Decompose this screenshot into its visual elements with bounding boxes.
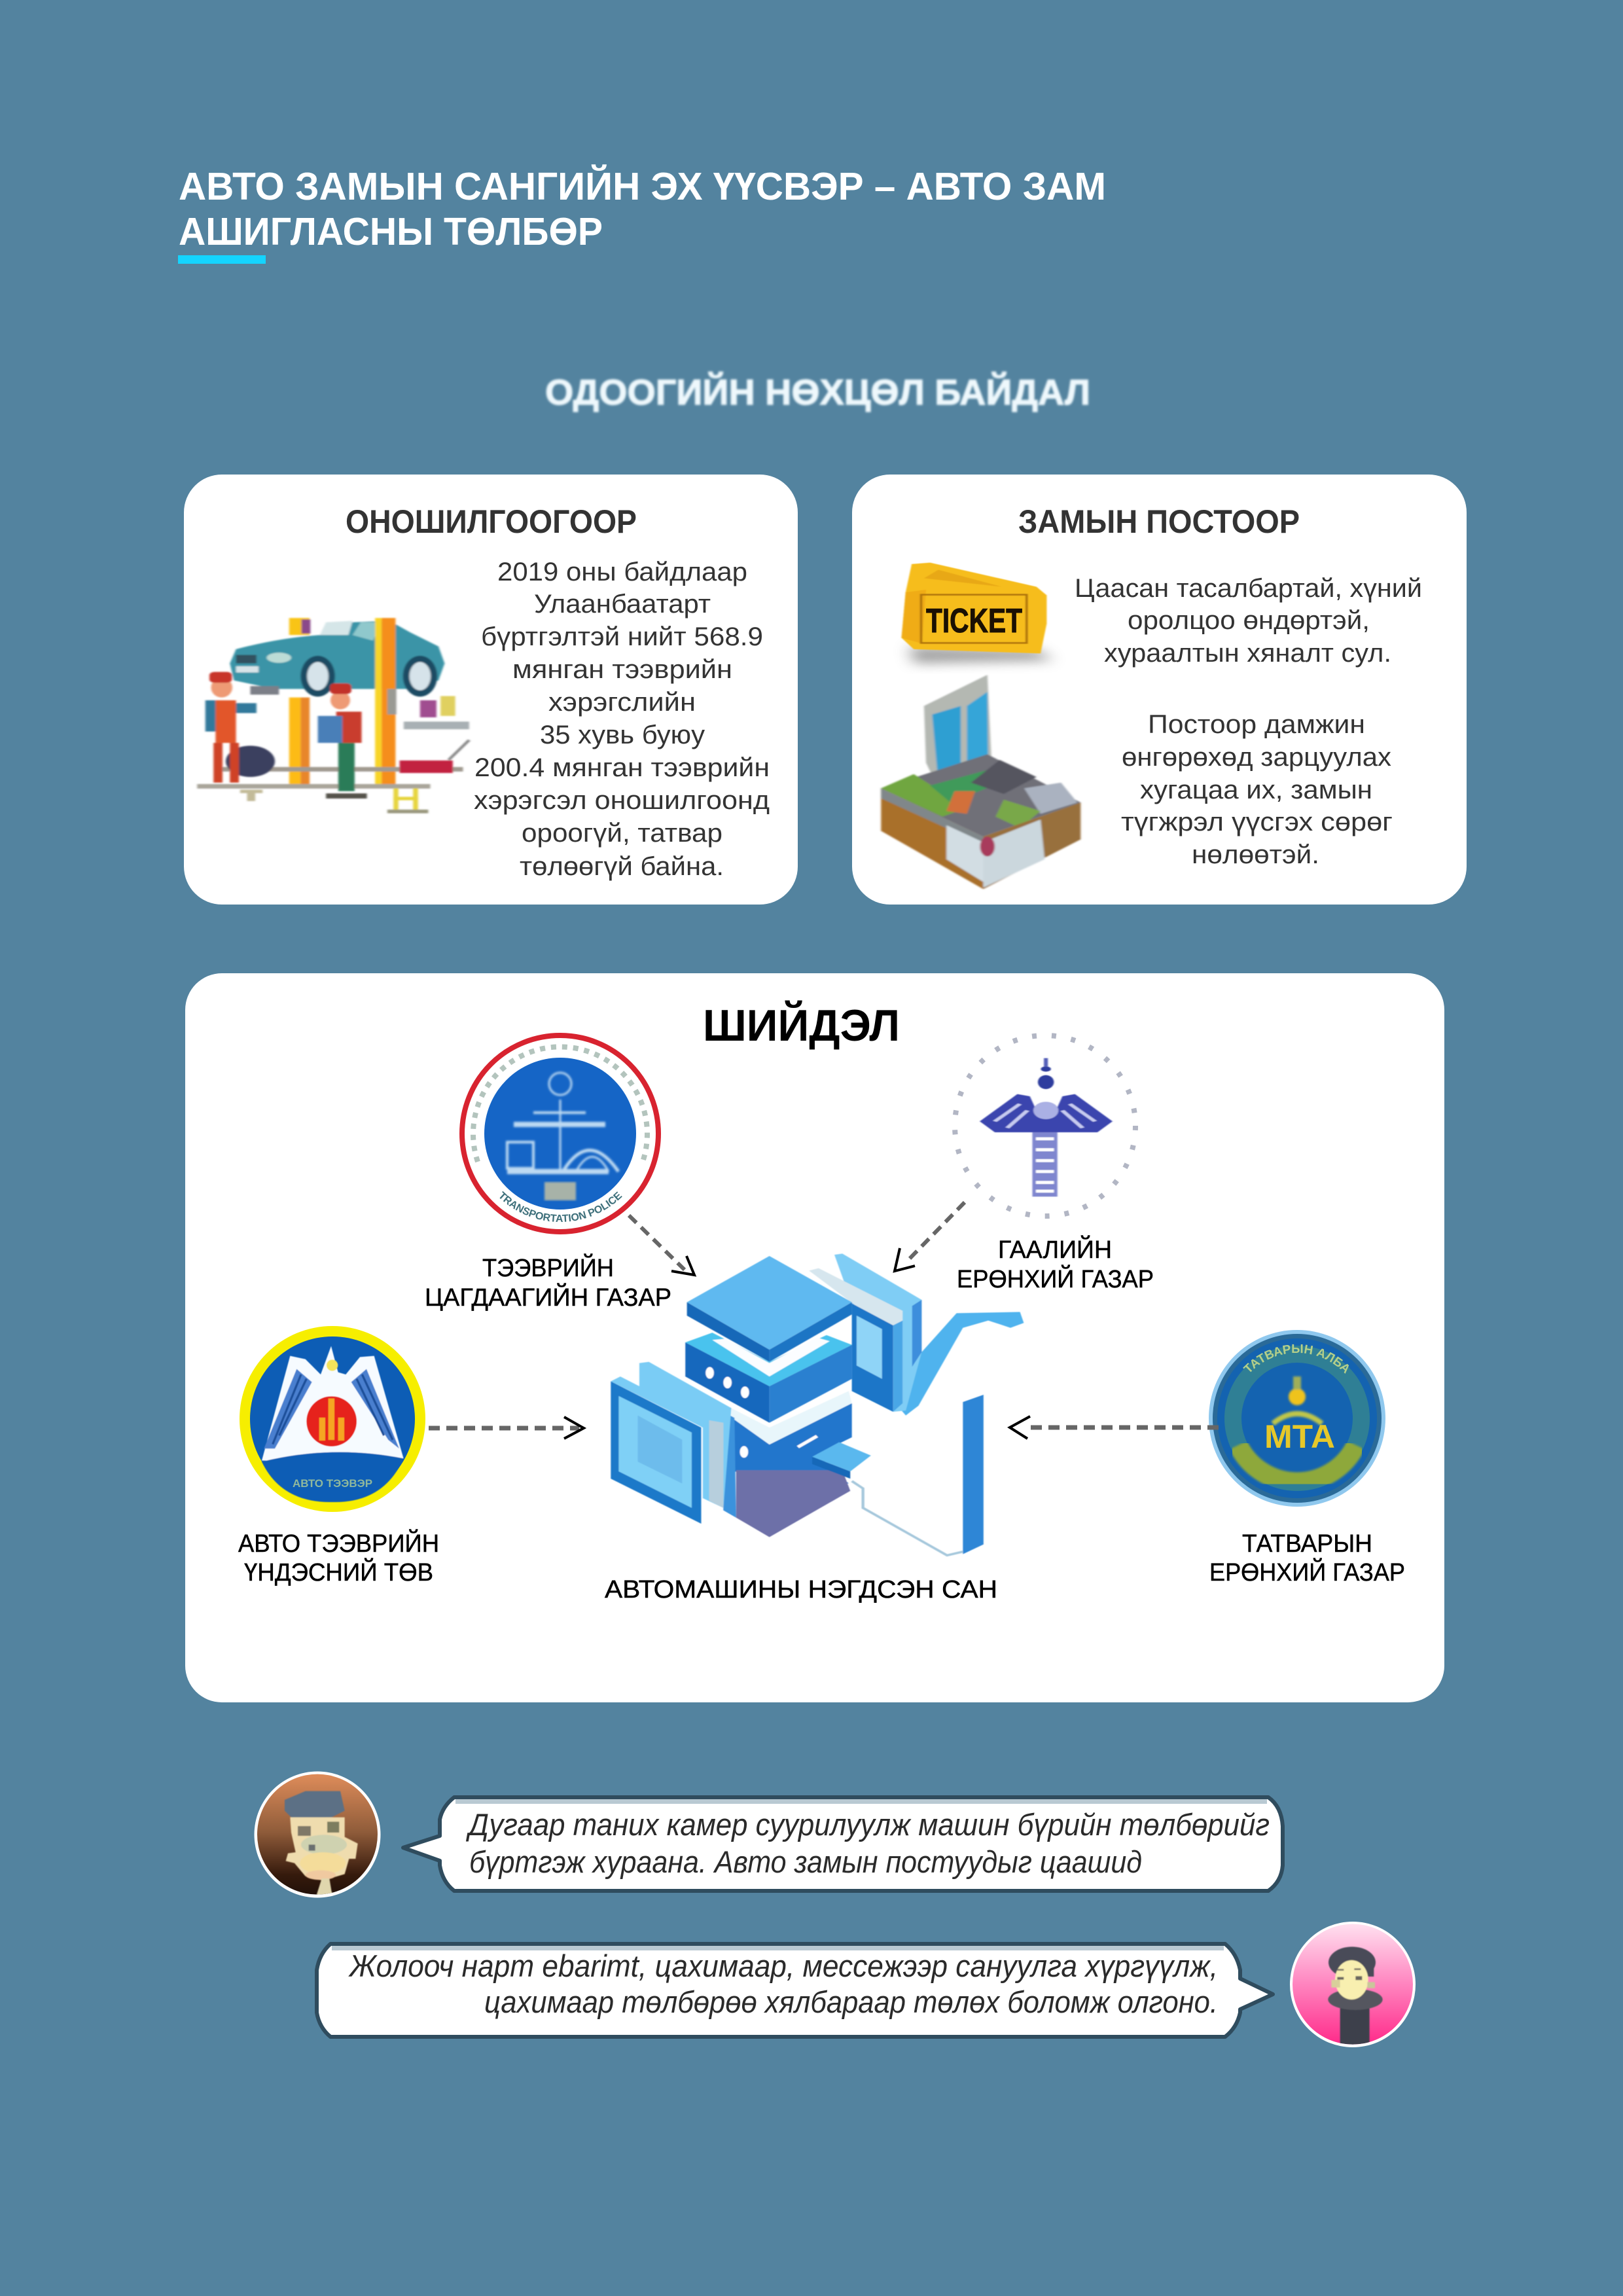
icon: ticket: TICKET	[926, 602, 1022, 640]
body text: diagnostics	[474, 558, 770, 881]
illustration: server database	[611, 1253, 1024, 1555]
illustration: building on a city block	[881, 675, 1080, 889]
label: customs	[957, 1234, 1154, 1293]
title: АШИГЛАСНЫ ТӨЛБӨР	[179, 210, 603, 253]
title accent bar	[178, 255, 266, 264]
body text: diagnostics: мянган тээврийн	[512, 655, 732, 684]
label: national road transport center: АВТО ТЭЭВРИЙН	[238, 1528, 439, 1558]
body text: diagnostics: төлөөгүй байна.	[520, 852, 724, 881]
body text: diagnostics: 200.4 мянган тээврийн	[474, 753, 770, 782]
title	[179, 164, 1106, 253]
bubble text: camera recognition: бүртгэж хураана. Авто замын постуудыг цаашид	[469, 1844, 1142, 1879]
arrow: road transport center to database	[429, 1417, 584, 1439]
speech bubble: electronic reminders	[317, 1944, 1273, 2037]
body text: road posts, congestion: өнгөрөхөд зарцуулах	[1122, 743, 1391, 772]
logo: national road transport center: АВТО ТЭЭВЭР	[293, 1477, 372, 1490]
body text: road posts, paper tickets: Цаасан тасалбартай, хүний	[1075, 574, 1422, 603]
logo: transportation police: TRANSPORTATION POLICE	[500, 1191, 622, 1222]
label: tax authority	[1209, 1530, 1405, 1587]
body text: diagnostics: хэрэгсэл оношилгоонд	[474, 786, 770, 815]
arrow: customs to database	[895, 1202, 965, 1271]
body text: diagnostics: 2019 оны байдлаар	[497, 558, 747, 586]
logo: tax authority: МТА	[1264, 1418, 1335, 1455]
label: tax authority: ЕРӨНХИЙ ГАЗАР	[1209, 1557, 1405, 1587]
label: national road transport center: ҮНДЭСНИЙ ТӨВ	[244, 1557, 433, 1587]
bubble text: electronic reminders: Жолооч нарт ebarimt, цахимаар, мессежээр сануулга хүргүүлж,	[348, 1948, 1218, 1983]
body text: diagnostics: хэрэгслийн	[548, 688, 696, 717]
body text: diagnostics: Улаанбаатарт	[534, 590, 711, 619]
bubble text: camera recognition: Дугаар таних камер суурилуулж машин бүрийн төлбөрийг	[465, 1807, 1270, 1842]
body text: road posts, congestion: хугацаа их, замын	[1140, 776, 1372, 804]
logo: tax authority	[1209, 1330, 1385, 1507]
arrow: police to database	[629, 1215, 694, 1275]
logo: transportation police	[459, 1033, 661, 1234]
panel heading: solution: ШИЙДЭЛ	[703, 1000, 900, 1050]
body text: diagnostics: бүртгэлтэй нийт 568.9	[481, 622, 763, 651]
label: transportation police: ТЭЭВРИЙН	[482, 1253, 614, 1282]
body text: diagnostics: ороогүй, татвар	[522, 819, 722, 848]
avatar: man	[254, 1771, 381, 1898]
subheading: current situation: ОДООГИЙН НӨХЦӨЛ БАЙДАЛ	[545, 371, 1090, 412]
body text: road posts, paper tickets: оролцоо өндөртэй,	[1128, 606, 1370, 635]
body text: road posts, paper tickets: хураалтын хяналт сул.	[1104, 639, 1391, 668]
title: АВТО ЗАМЫН САНГИЙН ЭХ ҮҮСВЭР – АВТО ЗАМ	[179, 164, 1106, 208]
panel heading: diagnostics: ОНОШИЛГООГООР	[346, 503, 637, 540]
body text: road posts, congestion: түгжрэл үүсгэх сөрөг	[1121, 808, 1393, 836]
label: national road transport center	[238, 1528, 439, 1587]
body text: road posts, congestion	[1121, 710, 1393, 869]
label: transportation police: ЦАГДААГИЙН ГАЗАР	[425, 1282, 671, 1312]
logo: tax authority: ТАТВАРЫН АЛБА	[1243, 1344, 1349, 1374]
logo: national road transport center	[240, 1326, 425, 1512]
bubble text: electronic reminders: цахимаар төлбөрөө хялбараар төлөх боломж олгоно.	[484, 1984, 1218, 2019]
illustration: car on a lift with mechanics	[197, 618, 469, 814]
avatar: woman	[1290, 1922, 1416, 2047]
icon: ticket	[902, 563, 1053, 664]
panel: solution	[185, 973, 1444, 1702]
arrow: tax authority to database	[1010, 1416, 1219, 1439]
label: customs: ЕРӨНХИЙ ГАЗАР	[957, 1264, 1154, 1293]
bubble text: camera recognition	[465, 1807, 1270, 1879]
body text: road posts, congestion: нөлөөтэй.	[1192, 840, 1319, 869]
label: tax authority: ТАТВАРЫН	[1242, 1530, 1372, 1558]
speech bubble: camera recognition	[403, 1797, 1283, 1891]
panel heading: road posts: ЗАМЫН ПОСТООР	[1018, 503, 1300, 540]
logo: customs	[955, 1035, 1135, 1216]
label: transportation police	[425, 1253, 671, 1312]
body text: diagnostics: 35 хувь буюу	[540, 721, 705, 749]
label: customs: ГААЛИЙН	[998, 1234, 1112, 1264]
body text: road posts, congestion: Постоор дамжин	[1148, 710, 1365, 739]
bubble text: electronic reminders	[348, 1948, 1218, 2019]
label: unified vehicle database: АВТОМАШИНЫ НЭГДСЭН САН	[605, 1576, 997, 1604]
body text: road posts, paper tickets	[1075, 574, 1422, 668]
panel: diagnostics	[184, 475, 798, 905]
panel: road posts	[852, 475, 1467, 905]
